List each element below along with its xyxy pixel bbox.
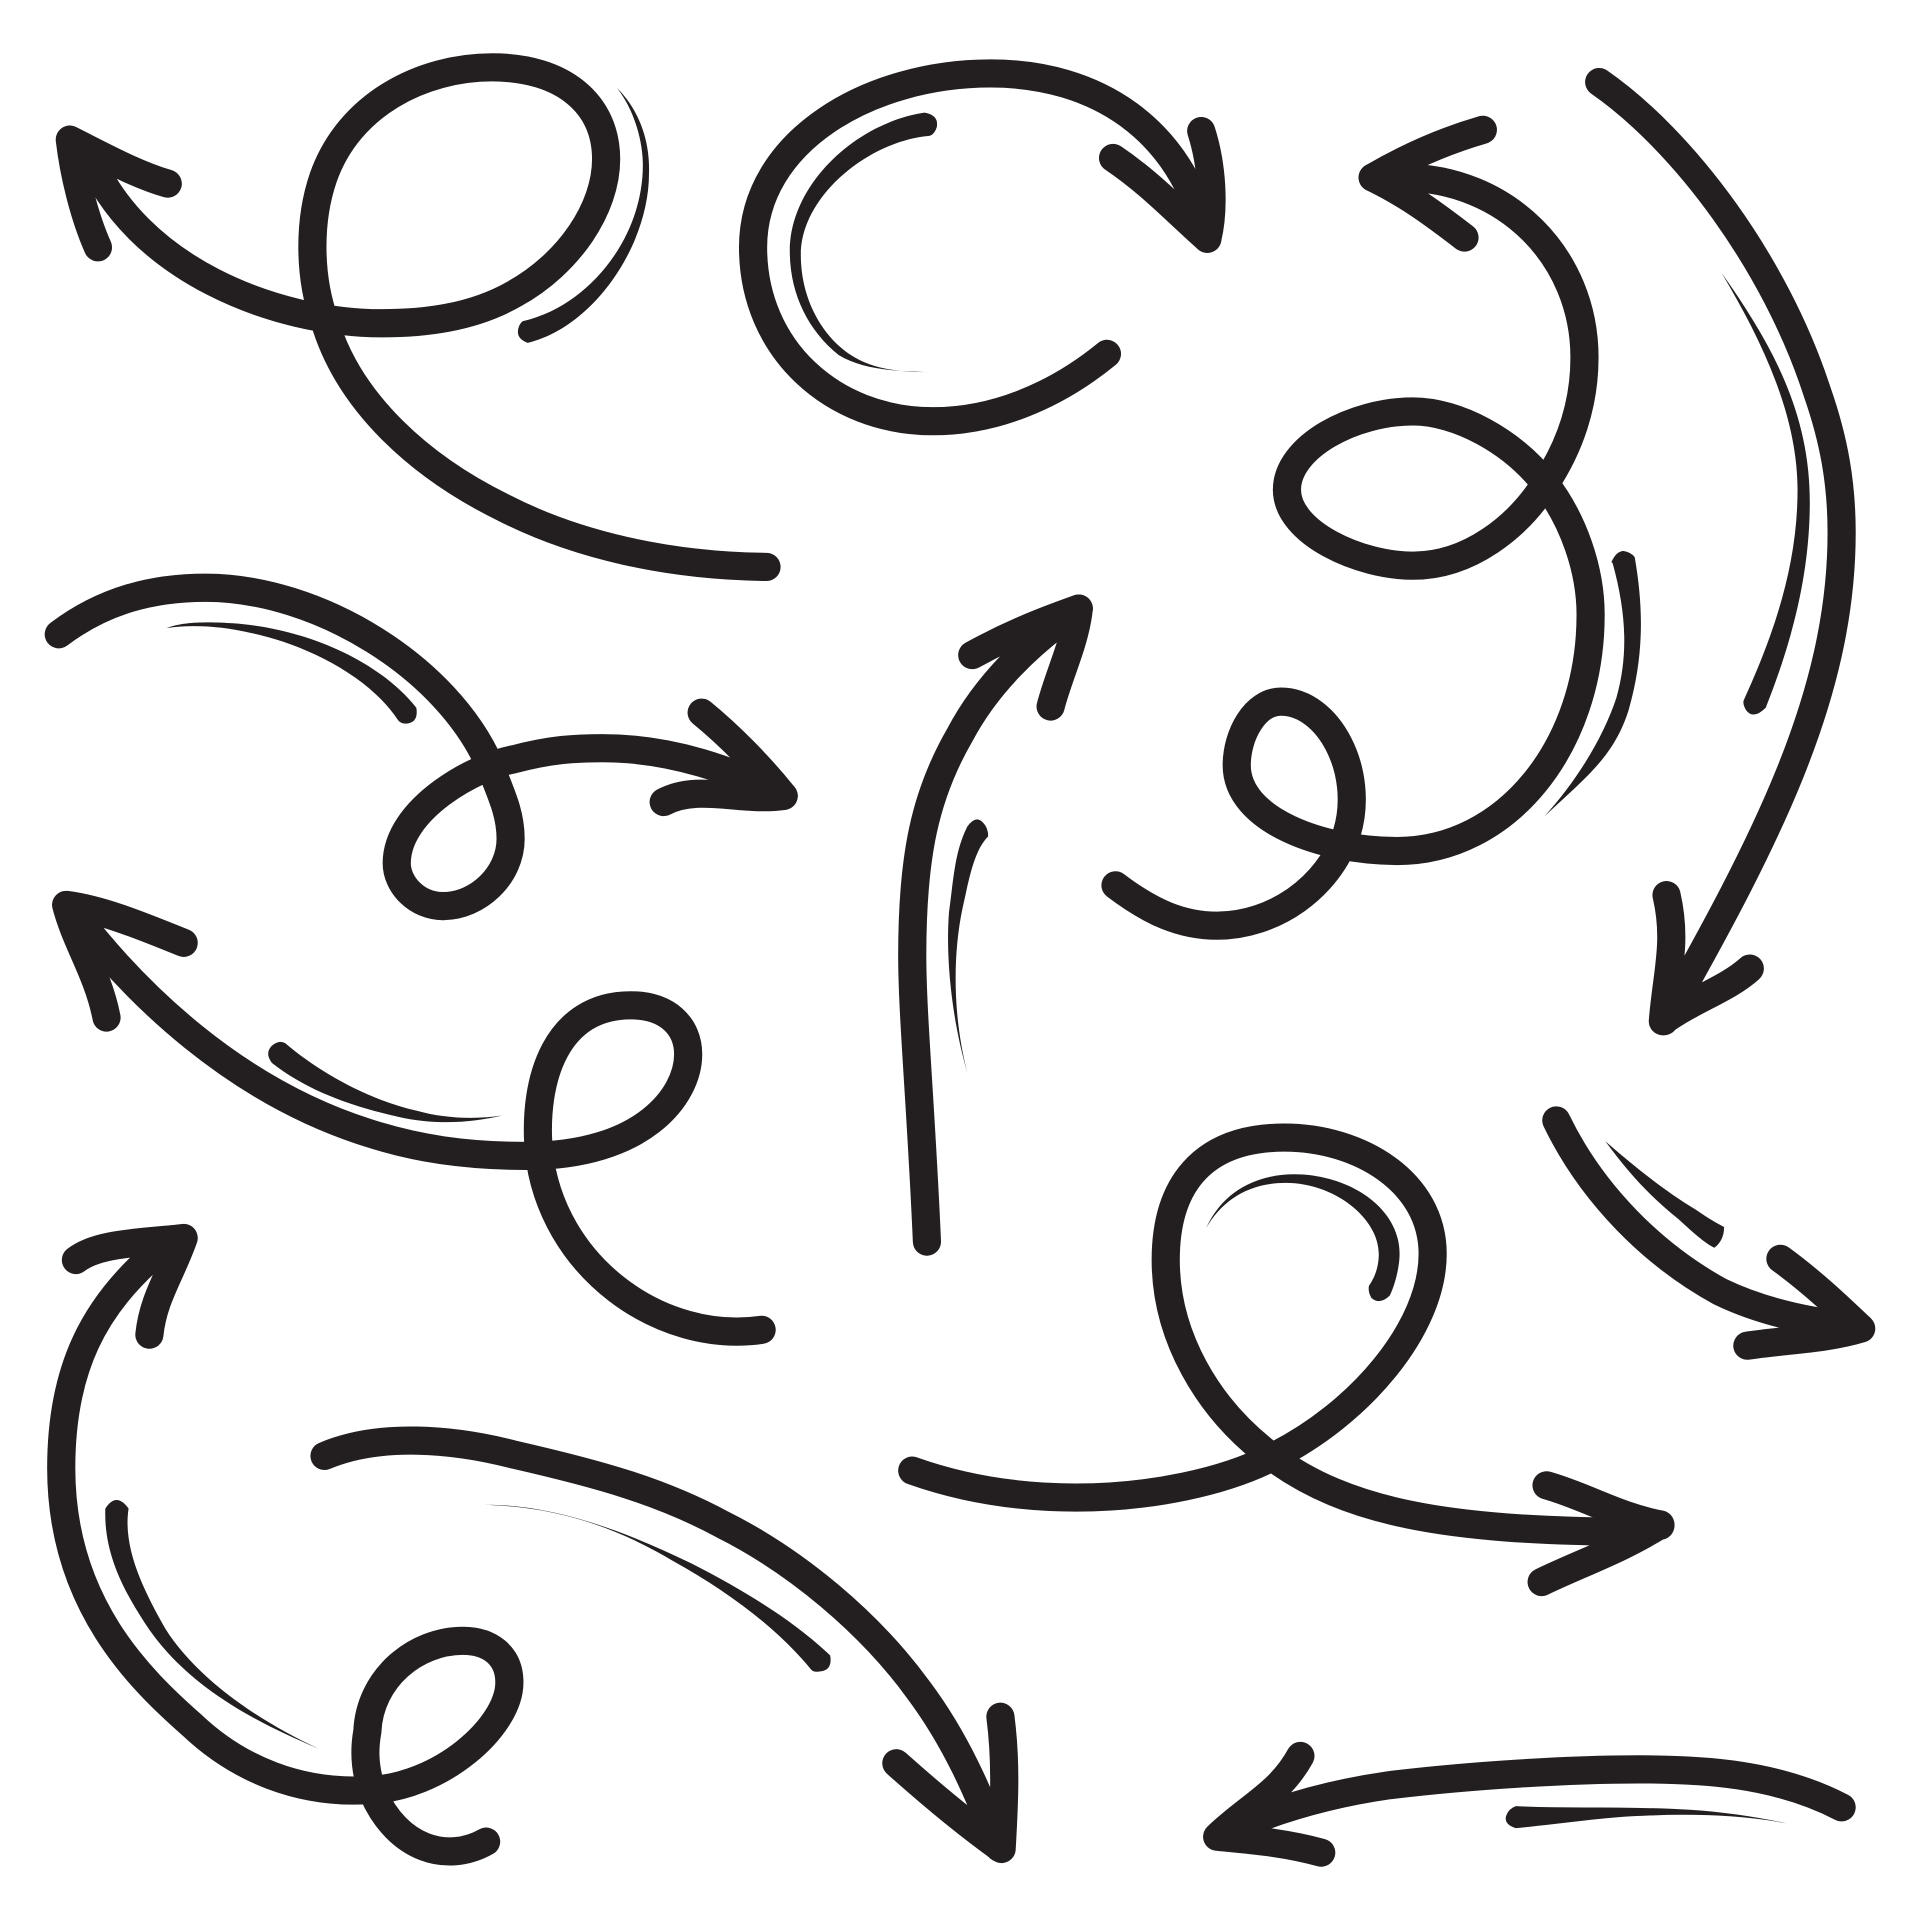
arrow 7: left loop pointing up-left [66, 905, 762, 1332]
arrow 12: bottom-right arrow pointing left [1217, 1756, 1842, 1853]
arrow 3: double-loop arrow pointing left [1116, 130, 1641, 926]
arrow 9: bottom-centre sweep pointing down-right [324, 1441, 1004, 1849]
arrow 11: short right arrow pointing down-right [1556, 1120, 1861, 1346]
arrow 4: long right-side curve pointing down [1599, 82, 1842, 1021]
arrow 10: large loop pointing right [912, 1138, 1660, 1582]
arrow 2: top-centre C curve [753, 73, 1212, 421]
arrow 6: centre arrow pointing up-right [912, 609, 1079, 1242]
arrow 5: left-middle loop pointing right [59, 588, 784, 906]
arrow 8: bottom-left loop pointing up-right [61, 1238, 509, 1851]
arrow 1: top-left loop pointing up-left [70, 67, 767, 567]
